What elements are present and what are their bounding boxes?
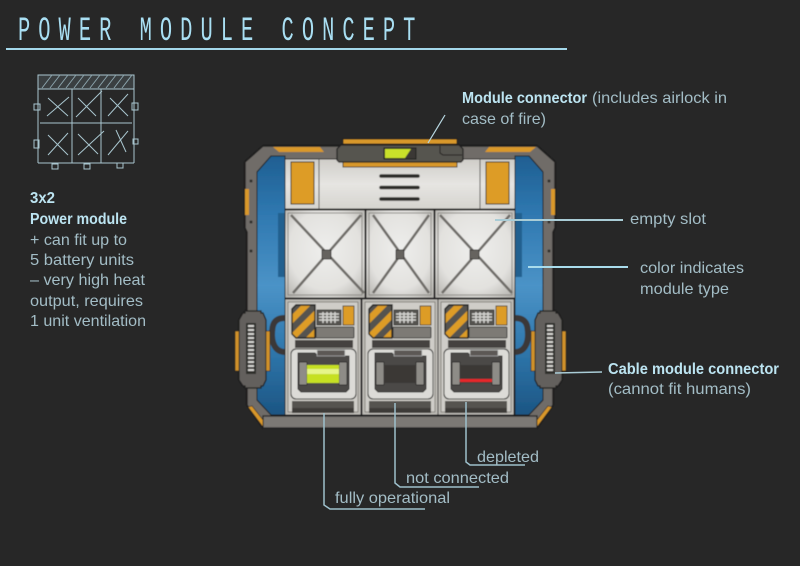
- orange hatches: [291, 162, 314, 204]
- cable module connector right: [531, 311, 566, 388]
- text block: module description: 5 battery units: [30, 252, 134, 269]
- callout: module connector: [428, 90, 727, 143]
- battery slot: fully operational: [285, 299, 361, 415]
- cable module connector left: [235, 311, 270, 388]
- bottom corner accents: [248, 406, 552, 427]
- callout: color indicates module type: module type: [640, 281, 729, 298]
- cable left: [272, 318, 285, 352]
- callout: fully operational: fully operational: [335, 490, 450, 507]
- callout: color indicates module type: color indicates: [640, 260, 744, 277]
- text block: module description: – very high heat: [30, 272, 146, 289]
- callout: cable module connector: Cable module connector: [608, 361, 779, 378]
- text block: module description: 3x2: [30, 190, 55, 207]
- blue side panels: [257, 156, 285, 415]
- right side accent: [551, 189, 555, 215]
- text block: module description: 1 unit ventilation: [30, 313, 146, 330]
- text block: module description: output, requires: [30, 293, 143, 310]
- text block: module description: Power module: [30, 211, 127, 228]
- outer frame: [245, 146, 555, 428]
- vent ribs: [278, 213, 522, 277]
- text block: module description: [30, 190, 146, 330]
- callout: module connector: Module connector: [462, 90, 587, 107]
- callout: cable module connector: (cannot fit humans): [608, 381, 751, 398]
- empty slots: [285, 210, 515, 298]
- vents: [381, 176, 418, 199]
- callout: cable module connector: [555, 361, 779, 398]
- text block: module description: + can fit up to: [30, 232, 127, 249]
- icon: 3x2 module sketch: [34, 75, 138, 169]
- callout: fully operational: [324, 413, 450, 509]
- cable right: [515, 318, 528, 352]
- battery slot: depleted: [438, 299, 514, 415]
- power module illustration: [235, 139, 566, 428]
- title: POWER MODULE CONCEPT: [18, 13, 423, 51]
- callout: depleted: [466, 402, 539, 466]
- battery slot: not connected: [362, 299, 438, 415]
- callout: empty slot: empty slot: [630, 211, 707, 228]
- callout: color indicates module type: [528, 260, 744, 298]
- callout: module connector: case of fire): [462, 111, 546, 128]
- callout: not connected: not connected: [406, 470, 509, 487]
- left side accent: [245, 189, 249, 215]
- callout: module connector: (includes airlock in: [592, 90, 727, 107]
- top corner accents: [273, 147, 536, 152]
- callout: depleted: depleted: [477, 449, 539, 466]
- callout: not connected: [395, 403, 509, 487]
- frame bolts: [250, 180, 550, 252]
- module connector: [337, 139, 463, 167]
- top panel: [285, 159, 515, 209]
- bottom frame: [263, 416, 537, 428]
